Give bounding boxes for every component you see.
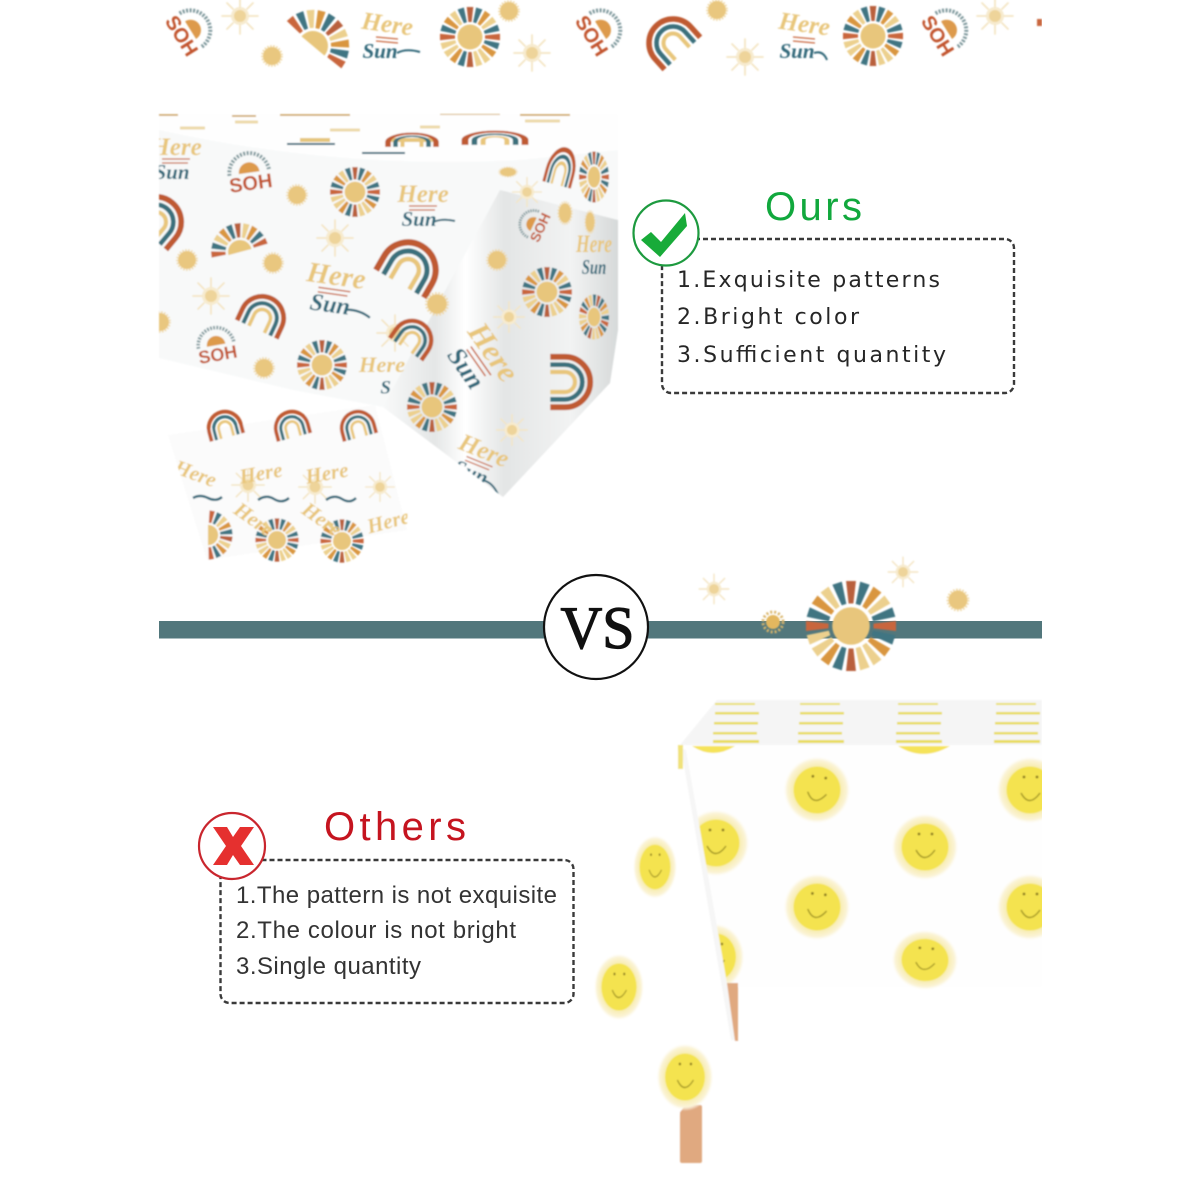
- list: others features: 2.The colour is not bright: [236, 917, 516, 944]
- cloth text and icons: Here: [575, 230, 612, 258]
- panel: other tablecloth photo: [592, 700, 1064, 1163]
- front table leg: [680, 1105, 702, 1163]
- heading: Others: Others: [324, 805, 466, 849]
- list: ours features: 3.Sufficient quantity: [677, 343, 946, 368]
- icon: rainbow: [645, 15, 703, 72]
- napkin text: Here: [363, 504, 412, 539]
- smiley faces on front: [698, 758, 1042, 989]
- divider bar: [159, 621, 1042, 638]
- cloth text and icons: SOH: [197, 341, 239, 368]
- napkin rainbows: [205, 408, 376, 441]
- tablecloth drape shading: [383, 190, 618, 497]
- list: others features: 1.The pattern is not exquisite: [236, 882, 557, 909]
- VS divider: [159, 557, 1042, 679]
- cloth text and icons: Here: [304, 256, 368, 296]
- panel: ours features: [634, 185, 1014, 393]
- tablecloth body: [159, 114, 618, 497]
- list: others features: [236, 882, 557, 980]
- table top: [680, 700, 1042, 745]
- icon: sun badge: SOH: [160, 12, 202, 60]
- divider decorations: [699, 557, 968, 671]
- icon: sun badge: [921, 8, 970, 58]
- icon: sun badge: [165, 8, 214, 58]
- cloth text and icons: Sun: [154, 160, 190, 184]
- cloth text and icons: Sun: [442, 342, 490, 395]
- cloth text and icons: Here: [149, 134, 202, 161]
- icon: sunburst: [843, 6, 903, 66]
- list: ours features: 1.Exquisite patterns: [677, 268, 940, 293]
- icon: sun badge: SOH: [916, 12, 958, 60]
- list: others features: 3.Single quantity: [236, 953, 421, 980]
- list: ours features: [677, 268, 946, 368]
- cloth text and icons: Sun: [308, 288, 352, 321]
- text: Here Comes the Sun: [360, 12, 422, 60]
- dashed feature box: [220, 860, 574, 1003]
- list: ours features: 2.Bright color: [677, 305, 860, 330]
- panel: our tablecloth photo: [127, 114, 618, 563]
- cloth text and icons: [127, 132, 613, 496]
- icon: red cross: [199, 813, 265, 879]
- VS badge: [544, 575, 648, 679]
- cloth text and icons: Sun: [582, 255, 606, 279]
- cloth text and icons: Here: [454, 429, 513, 473]
- smiley faces on drape: [594, 745, 714, 1111]
- cloth text and icons: SOH: [228, 170, 274, 198]
- napkin sunbursts: [207, 510, 364, 563]
- cloth text and icons: S: [380, 378, 391, 399]
- icon: sun badge: SOH: [570, 12, 612, 60]
- table front: [693, 746, 949, 987]
- napkin text: Here: [236, 458, 284, 489]
- perspective top strip pattern: [159, 114, 570, 153]
- back table leg: [727, 983, 738, 1041]
- VS badge: VS: [560, 595, 634, 661]
- decorative pattern strip: [160, 0, 1042, 75]
- text: Here Comes the Sun: Here: [776, 8, 832, 42]
- cloth text and icons: Here: [460, 315, 526, 388]
- text: Here Comes the Sun: [777, 12, 830, 62]
- cloth text and icons: SOH: [526, 210, 554, 245]
- text: Here Comes the Sun: Sun: [779, 39, 815, 63]
- text: Here Comes the Sun: Sun: [362, 39, 398, 63]
- napkin text: Here: [297, 496, 347, 541]
- cloth text and icons: Here: [358, 352, 405, 377]
- text: Here Comes the Sun: Here: [359, 8, 415, 42]
- cloth text and icons: Here: [396, 181, 449, 208]
- napkin text: Here: [229, 496, 279, 541]
- icon: green check: [634, 200, 698, 266]
- napkin text: [177, 460, 408, 536]
- icon: sunburst: [440, 7, 500, 67]
- top strip pattern: [692, 703, 1040, 754]
- napkin text: Here: [302, 458, 350, 489]
- heading: Ours: Ours: [765, 185, 862, 229]
- napkin text: Here: [170, 454, 220, 492]
- icon: half sun fan: [286, 9, 350, 69]
- napkins: [168, 405, 412, 563]
- corner drape: [678, 747, 737, 1114]
- dashed feature box: [662, 239, 1014, 393]
- cloth text and icons: Sun: [450, 455, 492, 490]
- cloth text and icons: Sun: [401, 207, 437, 231]
- panel: others features: [199, 805, 574, 1003]
- icon: sun badge: [575, 8, 624, 58]
